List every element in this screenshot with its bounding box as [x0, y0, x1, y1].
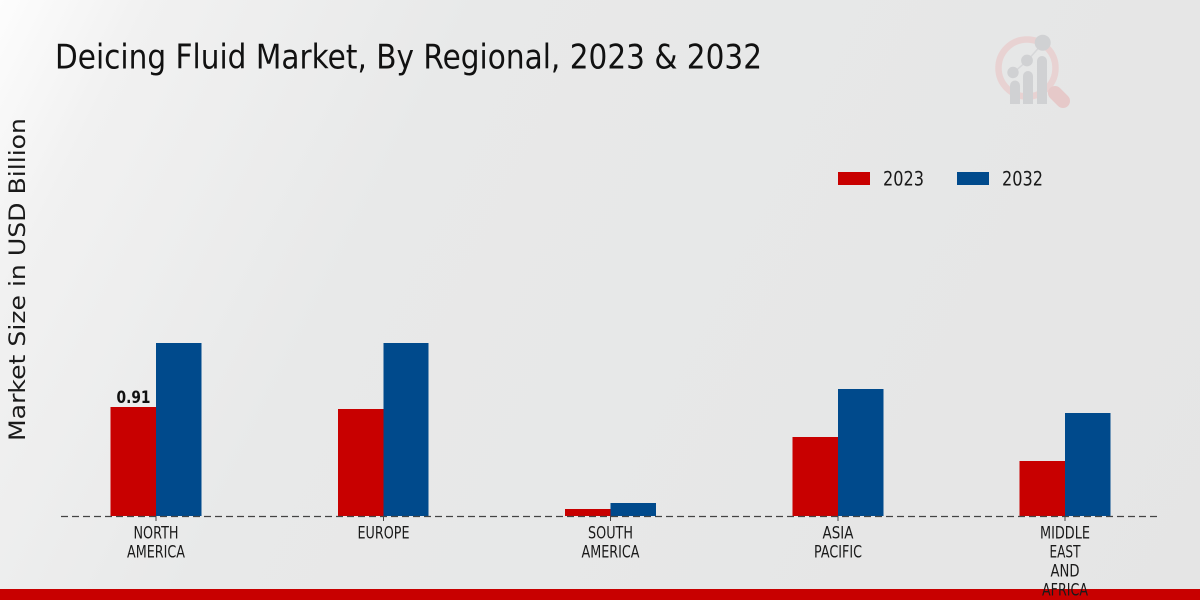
- footer bar: [0, 589, 1200, 600]
- category label: Asia Pacific: ASIA: [822, 524, 854, 542]
- bars: Europe: [338, 343, 428, 516]
- category label: Middle East and Africa: AFRICA: [1042, 580, 1089, 600]
- category label: South America: [582, 524, 640, 562]
- bars: North America: [110, 343, 202, 516]
- category label: Asia Pacific: PACIFIC: [814, 542, 862, 562]
- category label: Middle East and Africa: [1040, 524, 1090, 600]
- category label: Middle East and Africa: EAST: [1050, 542, 1081, 562]
- legend item: 2023: [838, 168, 924, 190]
- title: Deicing Fluid Market, By Regional, 2023 & 2032: [55, 38, 762, 78]
- category label: North America: AMERICA: [127, 542, 186, 562]
- bars: South America: [565, 503, 656, 516]
- bars: Middle East and Africa: [1020, 413, 1110, 516]
- bars: Asia Pacific: [792, 389, 884, 516]
- icon: watermark logo: [998, 35, 1063, 104]
- category label: Europe: EUROPE: [358, 524, 410, 542]
- legend item: 2032: [957, 168, 1043, 190]
- axis ticks: [156, 516, 1065, 521]
- legend item: 2023: 2023: [883, 168, 924, 190]
- category label: North America: NORTH: [134, 524, 178, 542]
- category label: North America: [127, 524, 186, 562]
- category label: South America: AMERICA: [582, 542, 640, 562]
- category label: South America: SOUTH: [588, 524, 633, 542]
- bar chart: [61, 343, 1160, 600]
- category label: Asia Pacific: [814, 524, 862, 562]
- value label: 0.91: 0.91: [116, 388, 150, 407]
- x axis baseline: [61, 516, 1160, 518]
- legend item: 2032: 2032: [1002, 168, 1043, 190]
- category label: Middle East and Africa: AND: [1050, 562, 1080, 580]
- y axis label: Market Size in USD Billion: [5, 118, 31, 441]
- legend: [838, 168, 1043, 190]
- category label: Middle East and Africa: MIDDLE: [1040, 524, 1090, 542]
